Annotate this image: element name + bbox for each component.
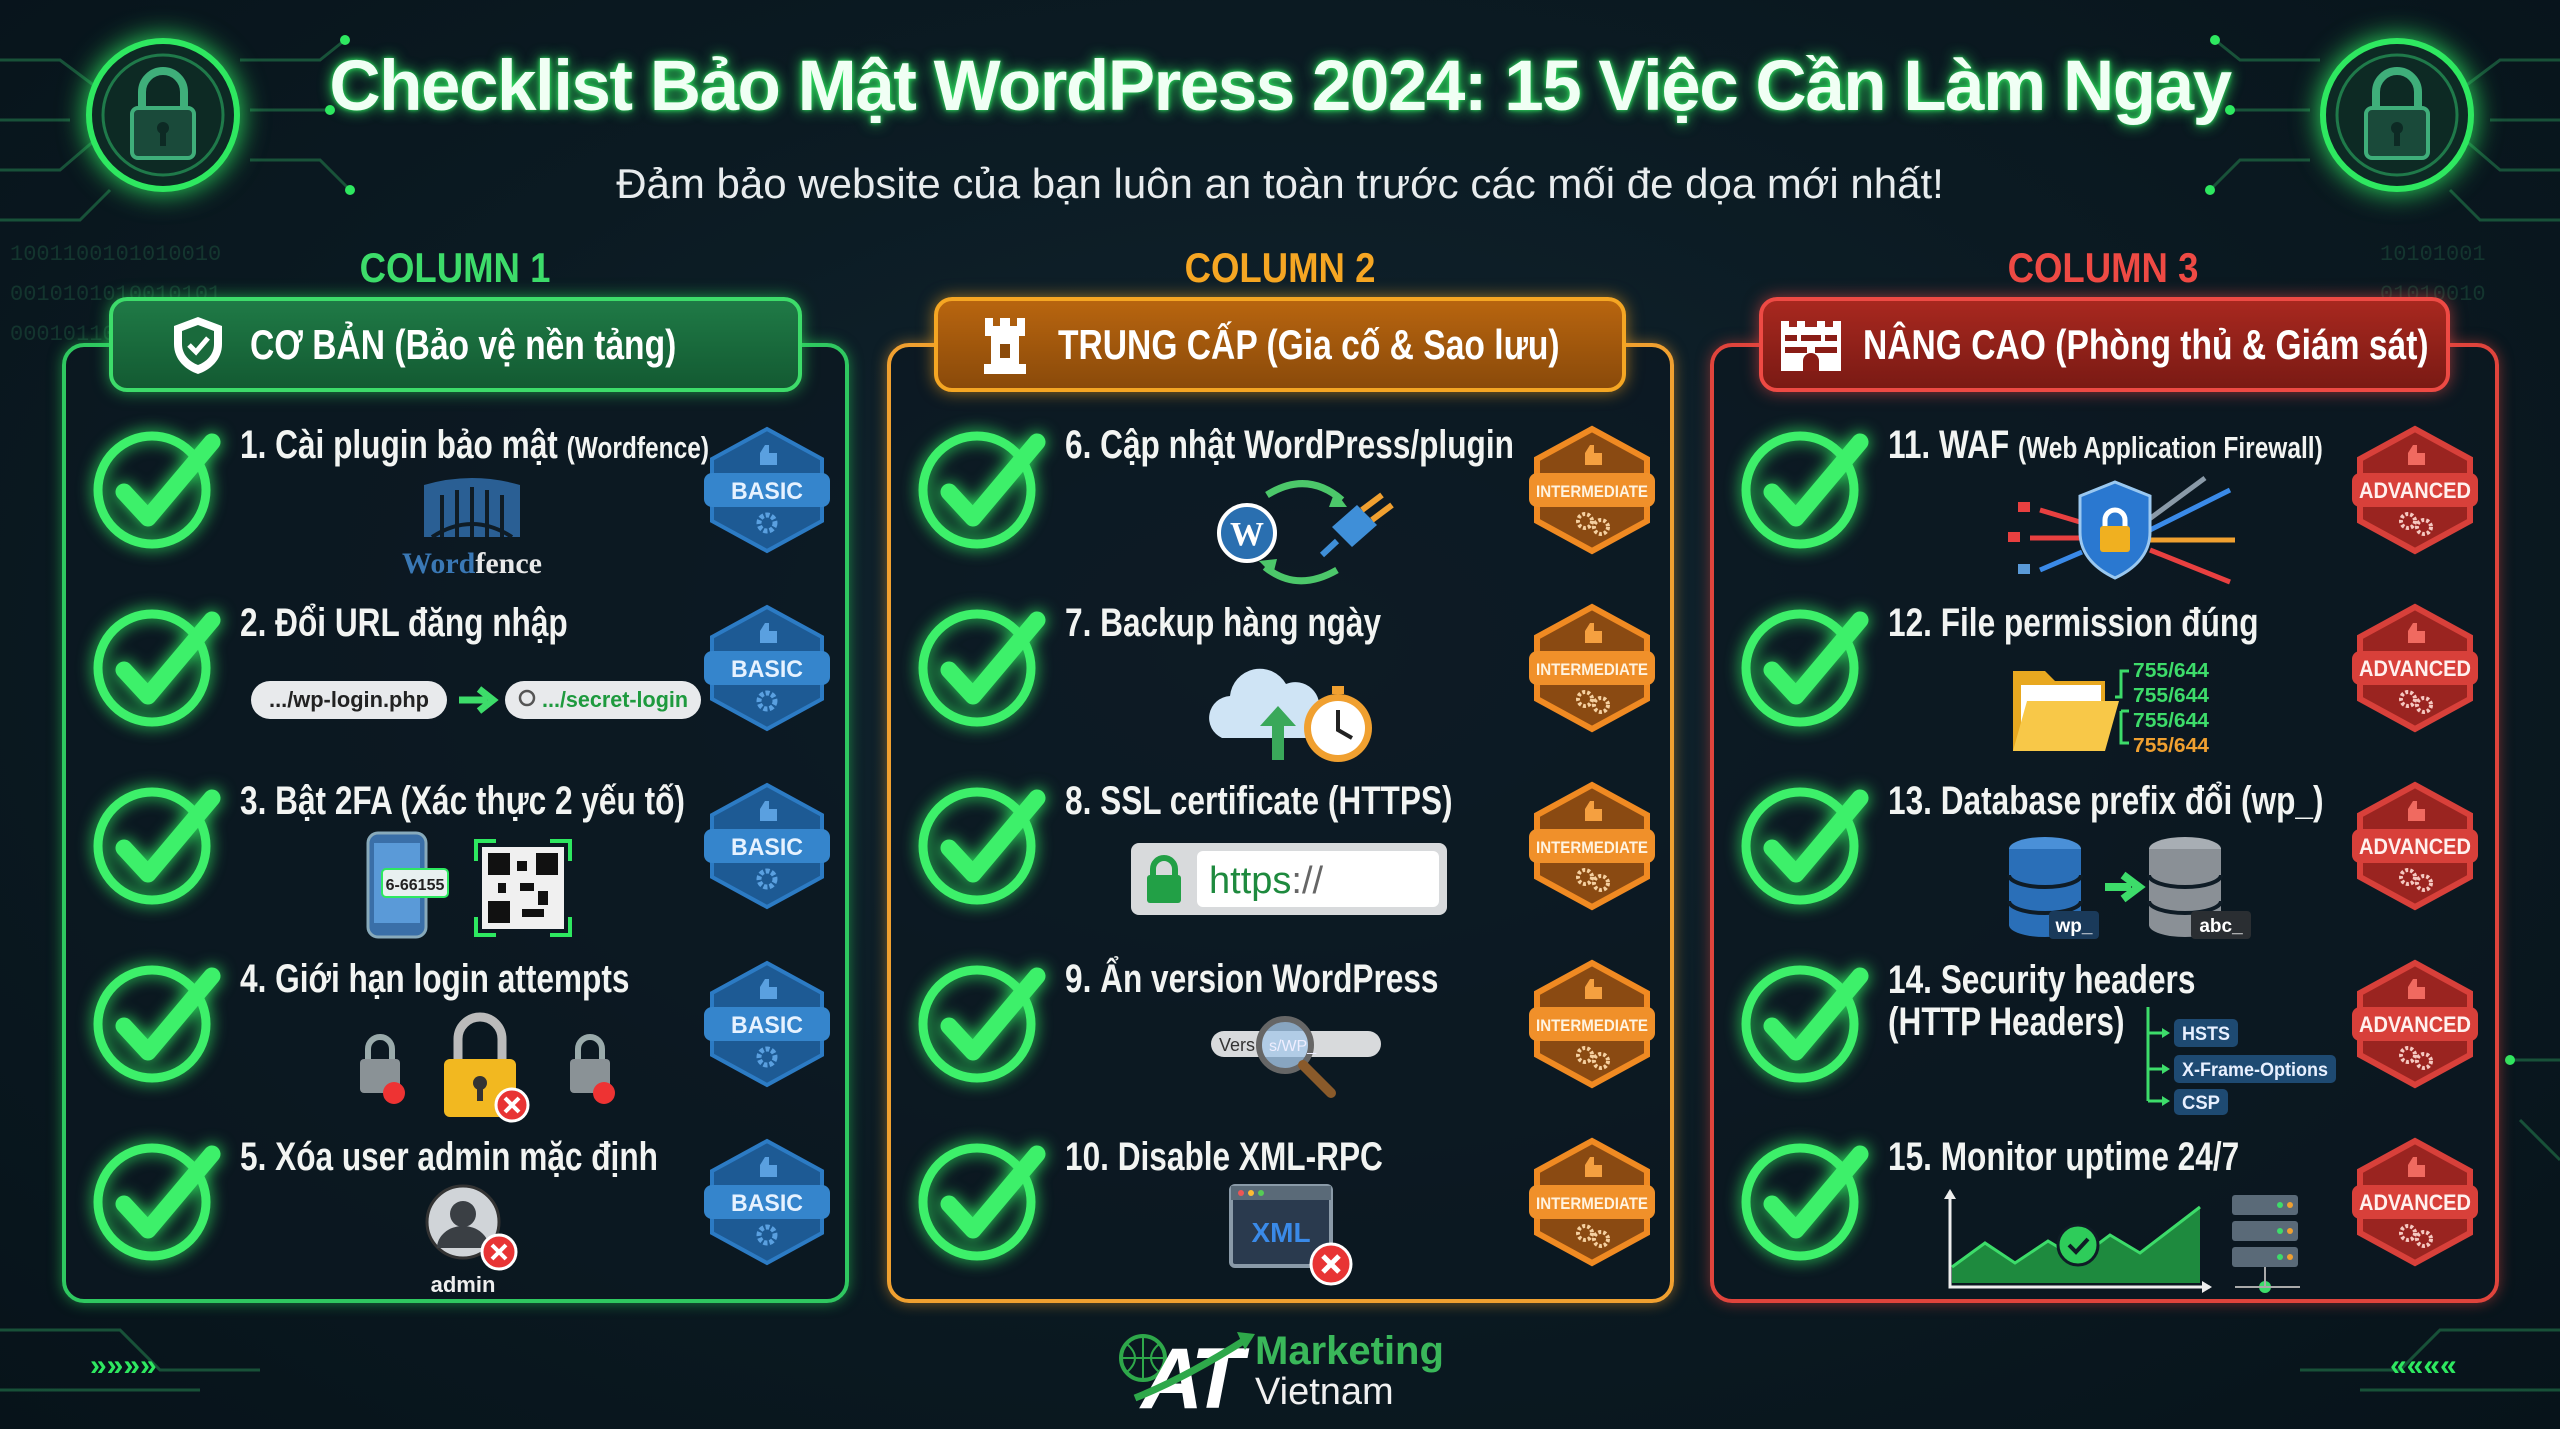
text: item title: 3. Bật 2FA (Xác thực 2 yếu tố) [240, 779, 685, 823]
heading: TRUNG CẤP [934, 297, 1626, 392]
icon: url change: .../wp-login.php [269, 687, 429, 712]
heading: NÂNG CAO: NÂNG CAO (Phòng thủ & Giám sát) [1863, 320, 2429, 368]
column label 3: COLUMN 3 [2008, 244, 2198, 291]
icon: url change [251, 681, 701, 719]
icon: XML window blocked: XML [1251, 1217, 1311, 1248]
badge: basic: BASIC [731, 656, 803, 683]
heading: TRUNG CẤP: TRUNG CẤP (Gia cố & Sao lưu) [1058, 320, 1560, 368]
icon: phone and QR: 6-66155 [386, 877, 444, 894]
icon: header list [2140, 1001, 2360, 1121]
icon: database prefix change: wp_ [2055, 916, 2093, 937]
badge: advanced: ADVANCED [2359, 478, 2471, 503]
text: item title: 1. Cài plugin bảo mật (Wordfence) [240, 423, 709, 467]
icon: folder permissions [2005, 651, 2265, 771]
badge: intermediate [1529, 426, 1655, 554]
logo: AT Marketing Vietnam: Vietnam [1255, 1371, 1394, 1413]
heading: CƠ BẢN [109, 297, 802, 392]
badge: basic: BASIC [731, 478, 803, 505]
text: item title: 5. Xóa user admin mặc định [240, 1135, 658, 1179]
background circuit decoration: «««« [2390, 1349, 2457, 1382]
badge: basic: BASIC [731, 834, 803, 861]
text: item title: 11. WAF (Web Application Firewall) [1888, 423, 2323, 467]
panel: column 3 advanced [1710, 343, 2499, 1303]
text: item title: 7. Backup hàng ngày [1065, 601, 1381, 645]
item 9 [906, 953, 1655, 1098]
icon: header list: HSTS [2182, 1024, 2230, 1045]
icon: database prefix change: abc_ [2199, 916, 2243, 937]
badge: advanced: ADVANCED [2359, 1190, 2471, 1215]
item 14 [1710, 949, 2499, 1124]
icon: checkmark [81, 1131, 232, 1273]
background circuit decoration: 0001011010100 [10, 322, 182, 347]
item 2 [81, 597, 830, 739]
badge: advanced [2350, 959, 2480, 1089]
icon: database prefix change [2005, 831, 2275, 946]
badge: intermediate [1527, 1137, 1657, 1267]
icon: wordfence logo: Wordfence [402, 547, 542, 580]
column label 1: COLUMN 1 [360, 244, 550, 291]
text: item title: 10. Disable XML-RPC [1065, 1135, 1383, 1179]
heading: NÂNG CAO [1759, 297, 2450, 392]
item 11 [1710, 415, 2499, 590]
logo: AT Marketing Vietnam [1105, 1318, 1465, 1418]
icon: folder permissions: 755/644 [2133, 710, 2210, 732]
icon: left lock emblem [64, 16, 262, 214]
icon: checkmark [915, 1132, 1055, 1272]
text: item title: 4. Giới hạn login attempts [240, 957, 629, 1001]
badge: basic [704, 782, 830, 910]
item 6 [906, 419, 1655, 584]
icon: XML window blocked [1227, 1182, 1367, 1292]
icon: right lock emblem [2298, 16, 2496, 214]
icon: magnifier over version: s/WP_ [1269, 1038, 1317, 1055]
icon: https address bar [1131, 843, 1447, 915]
icon: https address bar: https:// [1209, 860, 1324, 902]
text: item title [1888, 959, 2195, 1043]
badge: intermediate [1529, 960, 1655, 1088]
icon: checkmark [906, 775, 1056, 917]
badge: advanced [2350, 1137, 2480, 1267]
text: item title: 15. Monitor uptime 24/7 [1888, 1135, 2239, 1179]
item 5 [81, 1131, 830, 1297]
icon: wordfence logo [402, 478, 542, 580]
icon: checkmark [81, 953, 231, 1095]
badge: basic: BASIC [731, 1012, 803, 1039]
column label 2: COLUMN 2 [1185, 244, 1375, 291]
item 1 [81, 419, 830, 580]
icon: header list: CSP [2182, 1093, 2220, 1114]
text: item title: 12. File permission đúng [1888, 601, 2258, 645]
icon: checkmark [1738, 776, 1878, 916]
logo: AT Marketing Vietnam: Marketing [1255, 1329, 1444, 1373]
badge: basic [704, 426, 830, 554]
icon: phone and QR [366, 832, 572, 938]
badge: intermediate [1529, 782, 1655, 910]
item 3 [81, 775, 830, 938]
heading: CƠ BẢN: CƠ BẢN (Bảo vệ nền tảng) [250, 320, 676, 368]
icon: magnifier over version [1211, 1016, 1381, 1098]
icon: checkmark [906, 953, 1056, 1095]
icon: wordpress update [1217, 480, 1394, 584]
icon: checkmark [1738, 598, 1878, 738]
icon: folder permissions: 755/644 [2133, 735, 2210, 757]
badge: basic [704, 960, 830, 1088]
badge: advanced: ADVANCED [2359, 1012, 2471, 1037]
badge: intermediate [1529, 604, 1655, 732]
badge: advanced [2350, 603, 2480, 733]
item 12 [1710, 593, 2499, 768]
panel: column 1 basic [62, 343, 849, 1303]
panel: column 2 intermediate [887, 343, 1674, 1303]
background circuit decoration: »»»» [90, 1349, 157, 1382]
icon: locks [360, 1012, 615, 1122]
icon: magnifier over version: Vers [1219, 1035, 1255, 1055]
icon: folder permissions: 755/644 [2133, 660, 2210, 682]
background circuit decoration: 0010101010010101 [10, 282, 221, 307]
item 15 [1710, 1127, 2499, 1302]
icon: checkmark [1738, 1132, 1878, 1272]
item 4 [81, 953, 830, 1122]
icon: checkmark [1738, 954, 1878, 1094]
item 8 [906, 775, 1655, 917]
item 13 [1710, 771, 2499, 946]
background circuit decoration: 1001100101010010 [10, 242, 221, 267]
icon: checkmark [1738, 420, 1878, 560]
badge: basic: BASIC [731, 1190, 803, 1217]
badge: advanced: ADVANCED [2359, 656, 2471, 681]
badge: advanced [2350, 781, 2480, 911]
icon: admin user removed [426, 1184, 518, 1297]
icon: checkmark [906, 419, 1056, 561]
subtitle: Đảm bảo website của bạn luôn an toàn trước các mối đe dọa mới nhất! [616, 160, 1944, 207]
text: item title: (HTTP Headers) [1888, 1000, 2124, 1044]
icon: admin user removed: admin [431, 1272, 495, 1297]
text: item title: 14. Security headers [1888, 958, 2195, 1002]
title: Checklist Bảo Mật WordPress 2024: 15 Việc Cần Làm Ngay [329, 47, 2231, 126]
icon: WAF shield [2000, 470, 2250, 590]
icon: checkmark [81, 775, 231, 917]
icon: folder permissions: 755/644 [2133, 685, 2210, 707]
text: item title: 2. Đổi URL đăng nhập [240, 601, 568, 645]
icon: url change: .../secret-login [542, 687, 688, 712]
icon: checkmark [906, 597, 1056, 739]
item 10 [906, 1131, 1655, 1286]
icon: wordpress update: W [1230, 516, 1264, 553]
badge: advanced: ADVANCED [2359, 834, 2471, 859]
background circuit decoration: 10101001 [2380, 242, 2486, 267]
badge: basic [704, 1138, 830, 1266]
badge: advanced [2350, 425, 2480, 555]
icon: uptime chart and servers [1940, 1187, 2310, 1297]
text: item title: 6. Cập nhật WordPress/plugin [1065, 423, 1514, 467]
text: item title: 9. Ẩn version WordPress [1065, 957, 1438, 1001]
icon: checkmark [81, 419, 231, 561]
badge: basic [704, 604, 830, 732]
icon: header list: X-Frame-Options [2182, 1060, 2328, 1081]
text: item title: 8. SSL certificate (HTTPS) [1065, 779, 1453, 823]
icon: checkmark [81, 597, 231, 739]
background circuit decoration: 01010010 [2380, 282, 2486, 307]
item 7 [906, 597, 1655, 762]
icon: cloud backup and timer [1209, 668, 1372, 762]
text: item title: 13. Database prefix đổi (wp_) [1888, 779, 2324, 823]
